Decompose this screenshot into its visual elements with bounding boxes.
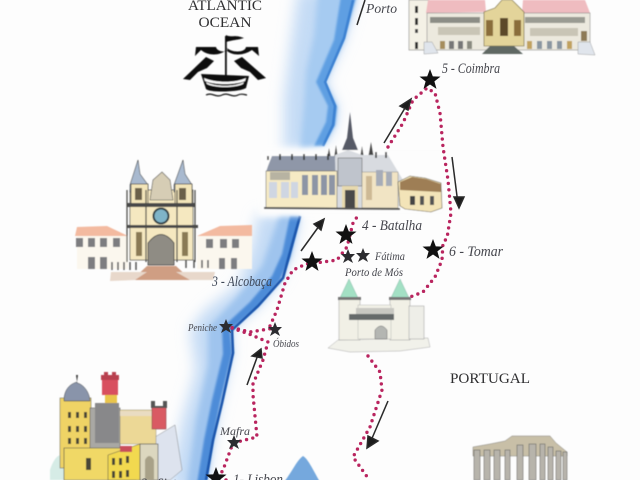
lake: Tagus estuary bbox=[284, 456, 320, 480]
ocean coastline bbox=[168, 0, 358, 480]
labels: places: 4 - Batalha bbox=[362, 218, 422, 234]
stars: main stops bbox=[206, 69, 444, 480]
label: ATLANTIC OCEAN bbox=[188, 0, 262, 31]
arrows: direction of route bbox=[247, 0, 464, 448]
building: Coimbra bbox=[409, 0, 595, 55]
labels: places: 3 - Alcobaça bbox=[211, 274, 272, 290]
building: Alcobaça monastery bbox=[75, 160, 252, 281]
labels: places: Peniche bbox=[187, 323, 218, 334]
building: Porto de Mós castle bbox=[328, 279, 430, 352]
building: Batalha monastery bbox=[258, 112, 446, 216]
route: dotted path bbox=[218, 88, 451, 480]
label: PORTUGAL: PORTUGAL bbox=[450, 371, 530, 387]
icon: ship bbox=[183, 35, 266, 96]
label: ATLANTIC OCEAN: OCEAN bbox=[198, 15, 252, 31]
building: Pena Palace, Sintra bbox=[50, 372, 182, 480]
labels: places: Fátima bbox=[374, 249, 405, 263]
labels: places: 5 - Coimbra bbox=[442, 61, 500, 77]
stars: minor stops bbox=[219, 248, 370, 449]
labels: places: Porto de Mós bbox=[344, 265, 403, 279]
labels: places bbox=[141, 2, 503, 480]
labels: places: Porto bbox=[365, 2, 397, 17]
labels: places: Óbidos bbox=[273, 338, 299, 350]
labels: places: Mafra bbox=[219, 424, 250, 438]
building: Temple of Évora bbox=[473, 436, 567, 480]
labels: places: 6 - Tomar bbox=[449, 244, 503, 260]
